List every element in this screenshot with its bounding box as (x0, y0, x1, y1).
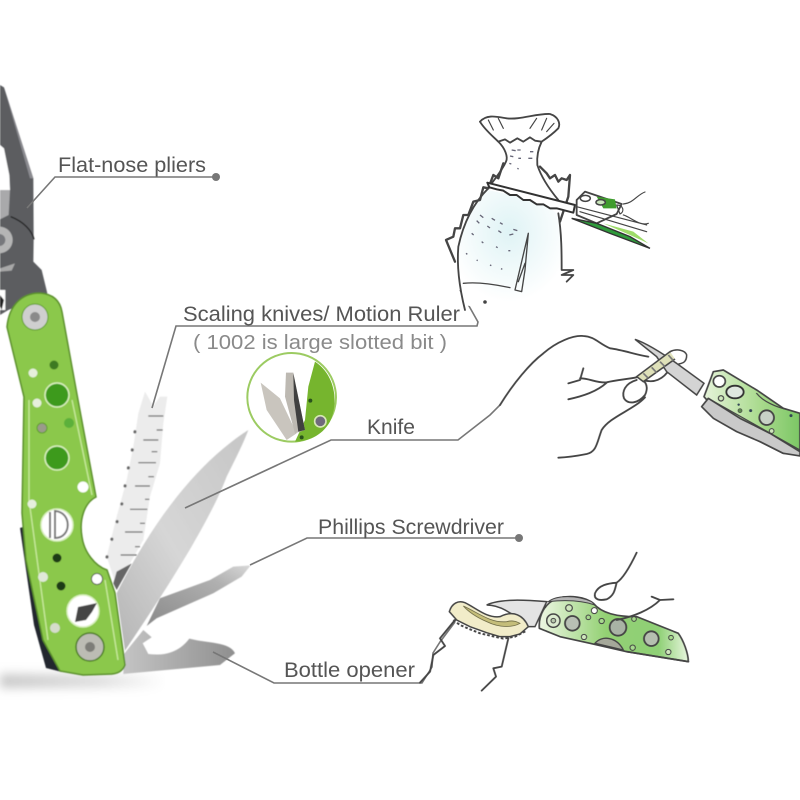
leader: bottle opener (213, 622, 455, 683)
bottle opener (123, 630, 235, 674)
leader: phillips screwdriver (250, 538, 519, 565)
screws and holes (22, 304, 48, 330)
dot: phillips screwdriver (515, 534, 523, 542)
inset: slotted bit detail (247, 353, 336, 442)
label: phillips screwdriver: Phillips Screwdriver (318, 516, 504, 539)
leader: flat-nose pliers (27, 177, 216, 208)
label: bottle opener: Bottle opener (284, 659, 415, 682)
green handle (7, 293, 125, 675)
illustration: fish scaling (446, 114, 650, 310)
knife blade (117, 430, 248, 651)
label: flat-nose pliers: Flat-nose pliers (58, 154, 206, 177)
phillips screwdriver (147, 565, 251, 626)
ground shadow (0, 674, 165, 688)
illustration: hand with knife (500, 336, 800, 458)
handle back (20, 526, 62, 672)
fish mouth dot (483, 300, 487, 304)
label: knife: Knife (367, 416, 415, 439)
leader: scaling knives (152, 290, 478, 408)
flat-nose pliers (0, 85, 47, 315)
illustration: bottle cap opener (420, 553, 688, 691)
ruler blade (107, 392, 167, 590)
multi-tool (0, 85, 251, 675)
dot: flat-nose pliers (212, 173, 220, 181)
note: slotted bit: ( 1002 is large slotted bit ) (193, 332, 447, 354)
label: scaling knives: Scaling knives/ Motion Ruler (183, 303, 460, 326)
leader: knife (185, 405, 500, 508)
